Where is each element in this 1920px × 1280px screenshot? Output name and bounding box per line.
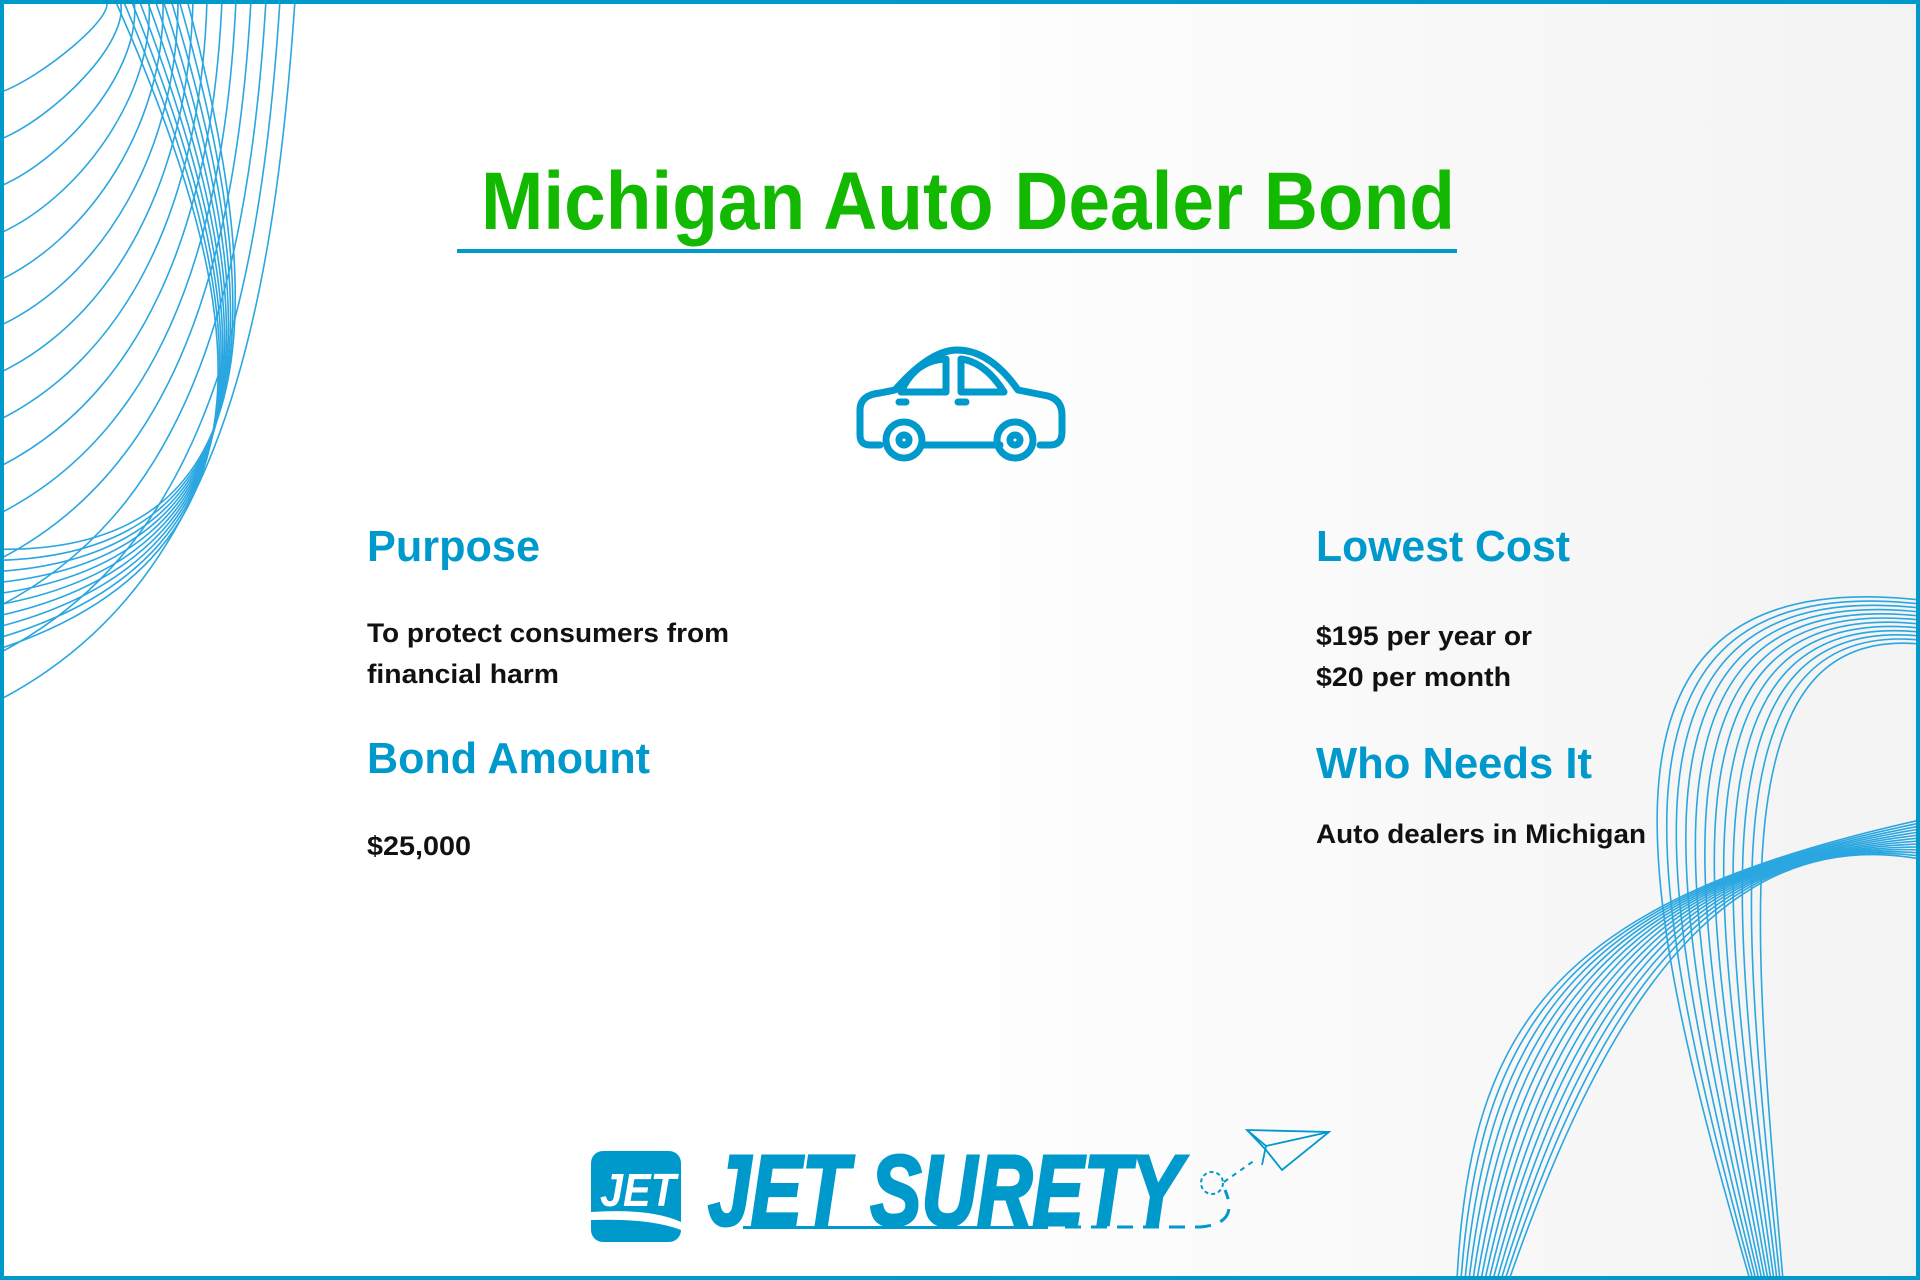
panel: bond amount: [367, 734, 650, 861]
panel: purpose: [367, 522, 729, 689]
panel: purpose: financial harm: [367, 659, 559, 689]
title: Michigan Auto Dealer Bond: [481, 156, 1455, 247]
panel: who needs it: [1316, 739, 1646, 849]
logo: jet surety: JET SURETY: [708, 1135, 1188, 1247]
panel: purpose: Purpose: [367, 522, 540, 571]
panel: lowest cost: [1316, 522, 1570, 692]
panel: who needs it: Who Needs It: [1316, 739, 1592, 788]
panel: bond amount: Bond Amount: [367, 734, 650, 783]
panel: lowest cost: $195 per year or: [1316, 621, 1533, 651]
icon: car: [860, 350, 1062, 458]
panel: lowest cost: $20 per month: [1316, 662, 1511, 692]
panel: who needs it: Auto dealers in Michigan: [1316, 819, 1646, 849]
panel: lowest cost: Lowest Cost: [1316, 522, 1570, 571]
panel: purpose: To protect consumers from: [367, 618, 729, 648]
logo: jet surety: JET: [600, 1164, 680, 1216]
panel: bond amount: $25,000: [367, 831, 471, 861]
